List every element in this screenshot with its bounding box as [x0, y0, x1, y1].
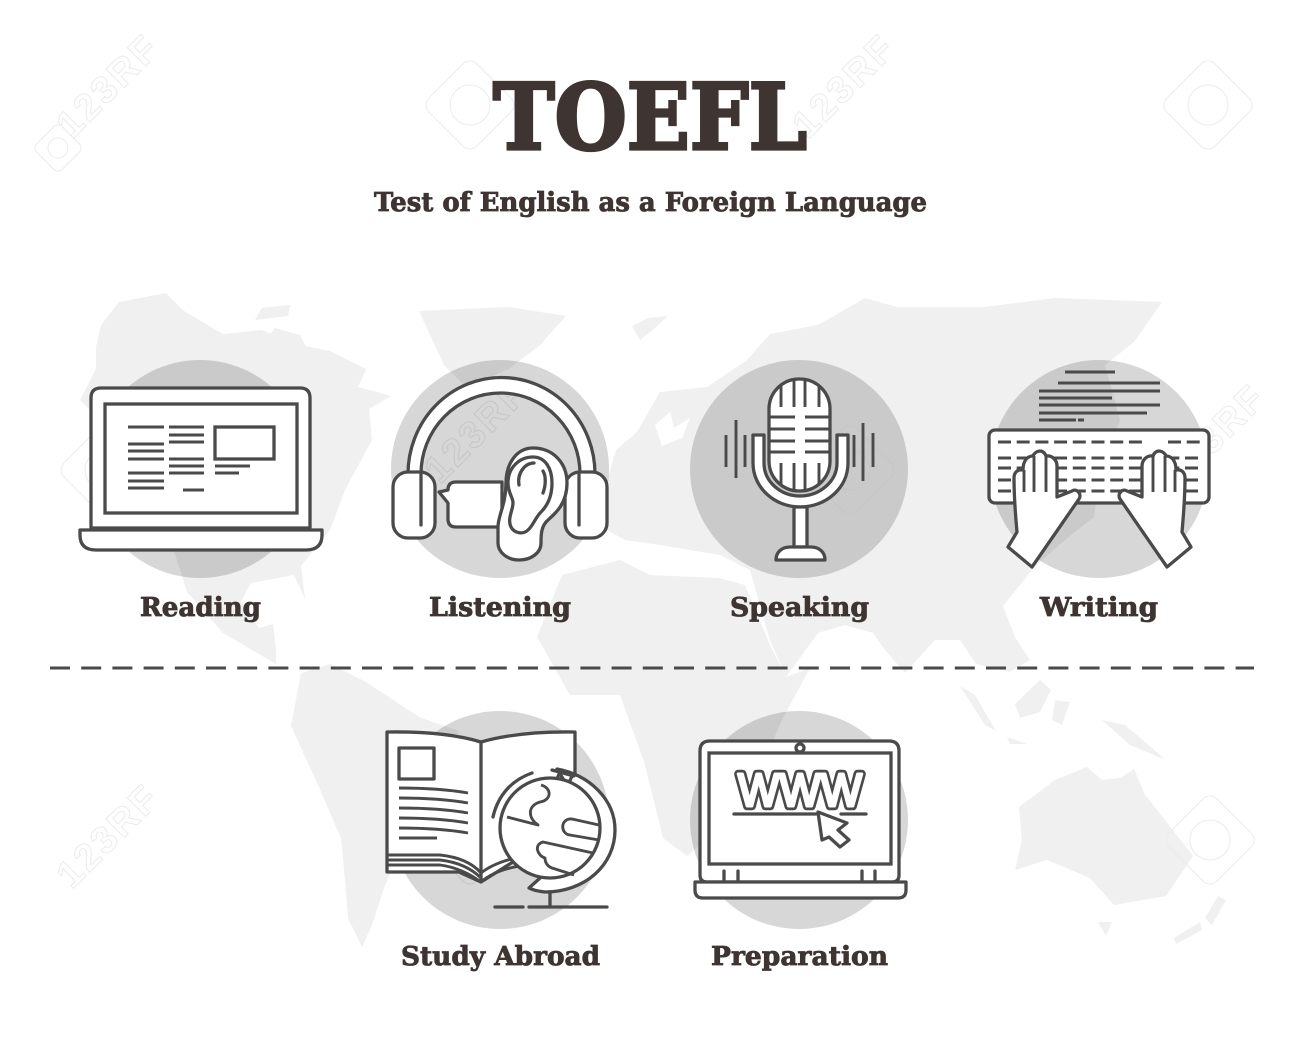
label: Writing: Writing [1039, 593, 1158, 623]
grey circles behind icons [91, 360, 1208, 929]
watermark 5: 123RF [49, 778, 167, 896]
watermark 3: 123RF [417, 373, 535, 491]
icon: keyboard with hands (writing) [989, 372, 1209, 567]
North America [80, 293, 391, 664]
watermark 2: 123RF [785, 28, 903, 146]
Arctic islands [255, 305, 310, 360]
Africa [537, 560, 810, 856]
watermark 4: 123RF [1155, 378, 1273, 496]
www inner: WWW [738, 764, 863, 816]
South America [291, 664, 459, 947]
label: Listening: Listening [429, 593, 571, 623]
label: Reading: Reading [140, 593, 261, 623]
icon: laptop with website (preparation) [695, 741, 906, 898]
world map background [80, 293, 1226, 947]
icon: headphones with ear (listening) [393, 377, 607, 560]
watermark 6: 123RF [782, 773, 900, 891]
icon: laptop with text (reading) [80, 388, 322, 550]
watermark 1: 123RF [49, 28, 167, 146]
Tasmania and New Zealand [1098, 896, 1226, 944]
watermark cameras [33, 57, 1258, 888]
Iceland [632, 316, 668, 340]
icon: book and globe (study abroad) [387, 732, 615, 907]
label: Study Abroad: Study Abroad [401, 942, 600, 972]
Eurasia [603, 298, 1162, 677]
www outline: WWW [738, 764, 863, 816]
title: TOEFL [493, 65, 807, 171]
Greenland [419, 307, 566, 387]
watermarks [33, 28, 1273, 896]
Australia [1015, 767, 1193, 905]
label: Preparation: Preparation [711, 942, 888, 972]
icon: microphone with sound waves (speaking) [726, 379, 873, 560]
subtitle: Test of English as a Foreign Language [374, 188, 927, 218]
Indonesia [960, 680, 1166, 760]
label: Speaking: Speaking [730, 593, 869, 623]
Baltic sea [655, 412, 690, 446]
dashed divider [50, 666, 1254, 670]
